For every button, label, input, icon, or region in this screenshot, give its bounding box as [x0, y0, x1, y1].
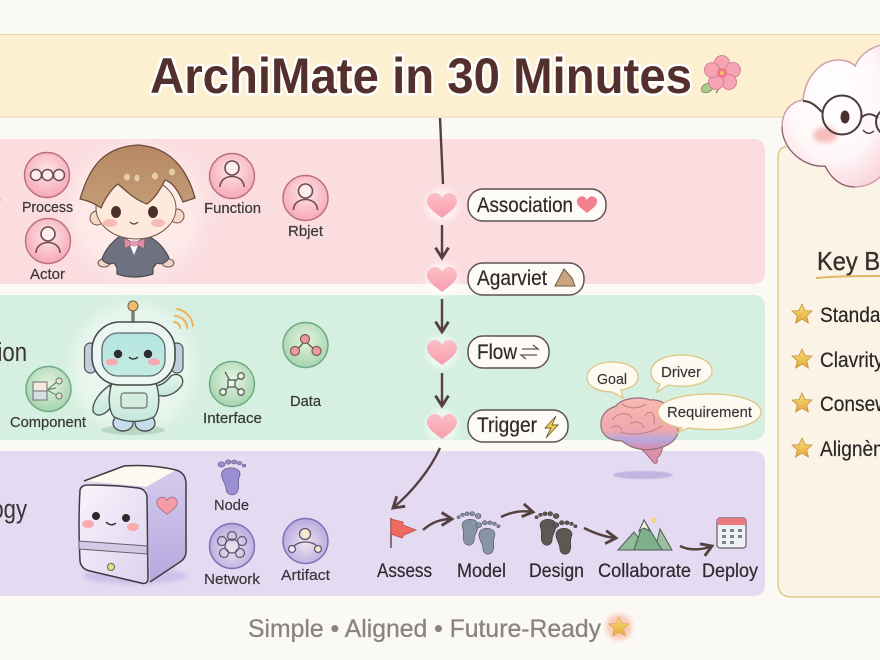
label: actor: Actor	[30, 266, 65, 283]
pill: agent: Agarviet	[477, 267, 547, 290]
label: data: Data	[290, 393, 322, 410]
label: model: Model	[457, 561, 506, 582]
icon: object	[283, 176, 328, 220]
label: function: Function	[204, 200, 261, 217]
footer tagline: Simple • Aligned • Future-Ready	[248, 615, 601, 643]
icon: brain	[601, 398, 678, 463]
label: network: Network	[204, 571, 261, 588]
title: ArchiMate in 30 Minutes	[150, 48, 692, 104]
hearts on relationship path	[425, 188, 459, 443]
icon: calendar	[717, 518, 746, 548]
panel: key benefits	[778, 146, 880, 597]
icon: network	[210, 524, 254, 568]
panel: business layer	[0, 139, 765, 284]
character: server	[79, 466, 187, 584]
pill: trigger: Trigger	[477, 414, 537, 437]
benefit: standards	[792, 304, 880, 327]
bubble: goal: Goal	[597, 371, 627, 388]
icon: glowing star	[606, 614, 632, 640]
icon: process	[24, 152, 70, 198]
label: object: Rbjet	[288, 223, 324, 240]
icon: component	[26, 366, 71, 412]
bubble: requirement	[658, 394, 761, 433]
pill: association: Association	[477, 194, 573, 217]
motivation brain with speech bubbles	[587, 355, 761, 479]
pill: flow	[468, 336, 549, 368]
title banner	[0, 34, 880, 117]
bubble: goal	[587, 362, 638, 398]
process roadmap	[377, 511, 758, 582]
panel: technology layer	[0, 451, 765, 596]
icon: flag	[391, 518, 416, 548]
icon: interface	[210, 362, 254, 406]
icon: artifact	[283, 518, 328, 564]
icon: function	[210, 154, 254, 198]
arrow: assess to model	[423, 519, 452, 530]
icon: flower	[702, 56, 740, 93]
benefit: clarity	[792, 349, 880, 372]
bubble: driver: Driver	[661, 364, 701, 381]
pill: association	[468, 189, 606, 221]
pill: agent	[468, 263, 584, 295]
benefit: alignment	[792, 438, 880, 461]
arrow: model to design	[501, 511, 533, 517]
bubble: requirement: Requirement	[667, 404, 753, 421]
arrow: design to collaborate	[584, 528, 616, 538]
label: deploy: Deploy	[702, 561, 758, 582]
arrow: flow to trigger	[441, 373, 443, 406]
icon: data	[283, 322, 328, 368]
character: robot	[84, 301, 193, 435]
label: assess: Assess	[377, 561, 432, 582]
benefit: conventions	[792, 393, 880, 416]
arrow: collaborate to deploy	[680, 546, 712, 549]
icon: node footprint	[218, 460, 246, 495]
pill: flow: Flow	[477, 341, 518, 364]
icon: design footprints	[535, 512, 577, 554]
icon: model footprints	[457, 512, 500, 554]
arrow: title to first heart	[440, 118, 443, 184]
icon: actor	[26, 218, 70, 264]
label: component: Component	[10, 414, 87, 431]
label: node: Node	[214, 497, 249, 514]
label: collaborate: Collaborate	[598, 561, 691, 582]
mascot: cloud with glasses	[782, 44, 880, 187]
bubble: driver	[651, 355, 712, 392]
panel: application layer	[0, 295, 765, 440]
label: interface: Interface	[203, 410, 262, 427]
arrow: trigger to assess	[393, 448, 440, 508]
arrow: agent to flow	[441, 299, 443, 332]
character: boy in suit	[80, 145, 195, 277]
label: artifact: Artifact	[281, 567, 331, 584]
arrow: association to agent	[441, 225, 443, 258]
label: design: Design	[529, 561, 584, 582]
label: process: Process	[22, 199, 73, 216]
icon: mountains	[618, 518, 672, 550]
pill: trigger	[468, 410, 568, 442]
